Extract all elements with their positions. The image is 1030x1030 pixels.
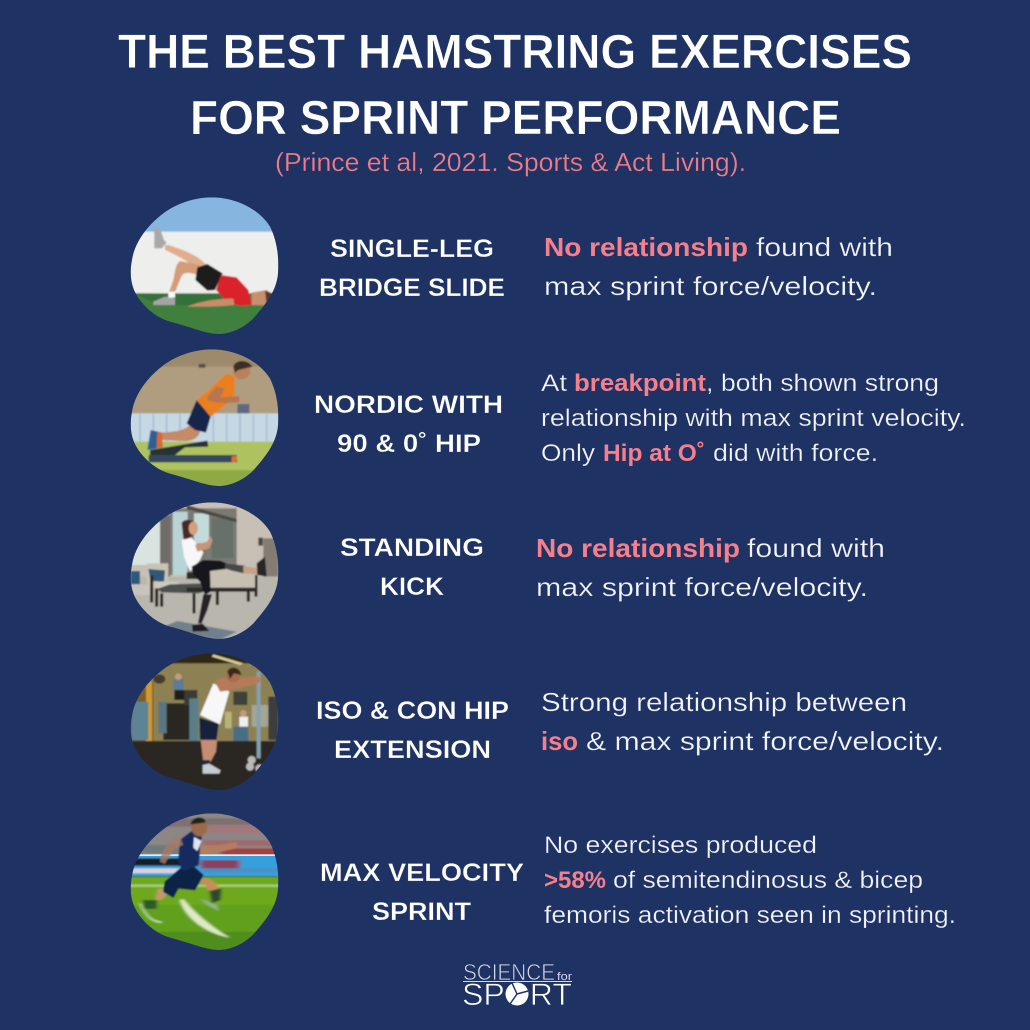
exercise name: 90 & 0˚ HIP xyxy=(337,430,481,458)
logo: Science for Sport xyxy=(462,959,572,1012)
finding: No exercises produced xyxy=(544,832,817,859)
exercise name xyxy=(320,859,524,926)
exercise name: ISO & CON HIP xyxy=(316,697,509,725)
finding: of semitendinosus & bicep xyxy=(613,867,923,894)
finding xyxy=(536,533,885,602)
finding: max sprint force/velocity. xyxy=(536,572,868,602)
photo: hip extension xyxy=(130,654,278,790)
finding xyxy=(544,832,956,929)
logo: Science for Sport: SCIENCE xyxy=(463,959,555,985)
photo: max velocity sprint xyxy=(130,814,278,950)
finding: Hip at O˚ xyxy=(603,440,705,467)
exercise name xyxy=(314,391,503,458)
row: single-leg bridge slide xyxy=(120,190,893,337)
finding: iso xyxy=(541,726,578,756)
exercise name: EXTENSION xyxy=(334,736,491,764)
photo: single-leg bridge slide xyxy=(130,198,278,334)
row: nordic with 90 and 0 degree hip xyxy=(120,347,966,488)
title: FOR SPRINT PERFORMANCE xyxy=(190,92,841,145)
finding: found with xyxy=(756,232,893,262)
finding: >58% xyxy=(544,867,606,894)
row: standing kick xyxy=(120,495,885,640)
logo: Science for Sport: for xyxy=(557,971,572,983)
title: THE BEST HAMSTRING EXERCISES xyxy=(118,26,912,79)
finding: , both shown strong xyxy=(706,370,939,397)
photo: standing kick xyxy=(130,502,278,639)
finding: No relationship xyxy=(536,533,740,563)
photo: nordic xyxy=(130,350,278,486)
finding: Only xyxy=(541,440,596,467)
exercise name xyxy=(340,534,484,601)
exercise name: BRIDGE SLIDE xyxy=(319,274,505,302)
exercise name: SPRINT xyxy=(372,898,471,926)
finding: Strong relationship between xyxy=(541,687,907,717)
finding: & max sprint force/velocity. xyxy=(586,726,944,756)
exercise name: KICK xyxy=(380,573,444,601)
finding: relationship with max sprint velocity. xyxy=(541,405,966,432)
finding xyxy=(541,687,944,756)
exercise name: MAX VELOCITY xyxy=(320,859,524,887)
logo: Science for Sport: SPORT xyxy=(462,976,572,1012)
exercise name xyxy=(319,235,505,302)
row: max velocity sprint xyxy=(130,814,954,950)
title xyxy=(118,26,912,145)
citation: (Prince et al, 2021. Sports & Act Living). xyxy=(275,147,746,177)
row: iso and con hip extension xyxy=(120,652,944,794)
exercise name xyxy=(316,697,509,764)
finding: At xyxy=(541,370,567,397)
finding xyxy=(541,370,966,467)
finding: breakpoint xyxy=(574,370,706,397)
finding: found with xyxy=(747,533,885,563)
finding: No relationship xyxy=(544,232,748,262)
exercise name: STANDING xyxy=(340,534,484,562)
exercise name: NORDIC WITH xyxy=(314,391,503,419)
finding xyxy=(544,232,893,301)
exercise name: SINGLE-LEG xyxy=(330,235,494,263)
finding: femoris activation seen in sprinting. xyxy=(544,902,956,929)
infographic canvas xyxy=(118,34,964,1006)
finding: max sprint force/velocity. xyxy=(544,271,877,301)
finding: did with force. xyxy=(713,440,878,467)
